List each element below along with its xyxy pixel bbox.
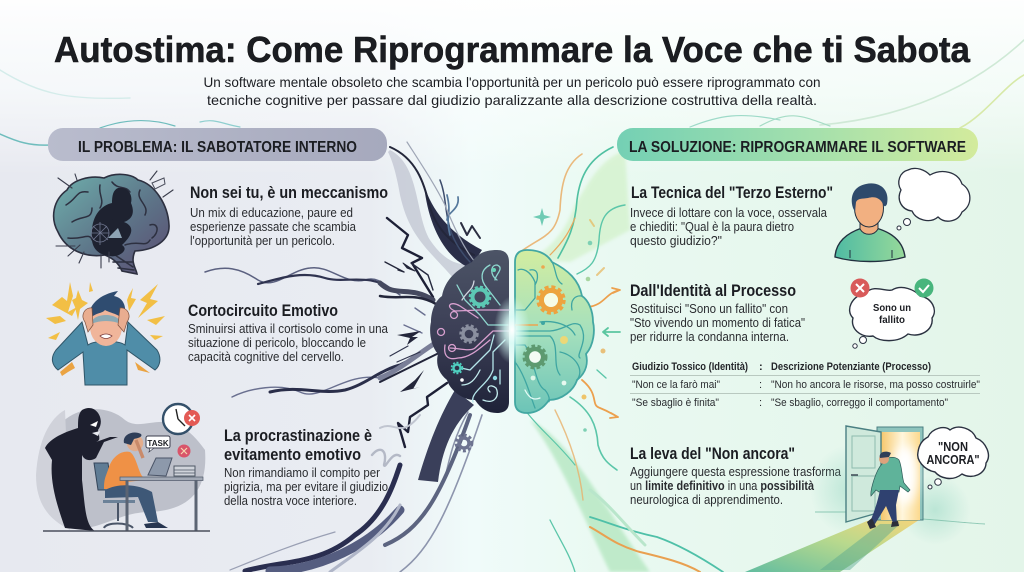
text block: Identita al Processo: Sostituisci "Sono un fallito" con <box>630 302 788 316</box>
panel: solution header: LA SOLUZIONE: RIPROGRAMMARE IL SOFTWARE <box>629 139 966 156</box>
icon: small gear below brain <box>456 435 472 451</box>
text block: Terzo Esterno: e chiediti: "Qual è la paura dietro <box>630 220 794 234</box>
text block: La procrastinazione <box>224 427 388 508</box>
text block: Non sei tu: Non sei tu, è un meccanismo <box>190 184 388 202</box>
flowing green and orange lines, right of brain <box>523 147 723 572</box>
icon: open door with walking man and NON ANCORA bubble: "NON <box>938 440 968 454</box>
text block: Non sei tu <box>190 184 388 248</box>
icon: brain with curled silhouette <box>54 171 173 274</box>
icon: open door with walking man and NON ANCORA bubble: ANCORA" <box>926 453 980 467</box>
text block: Identita al Processo: per ridurre la condanna interna. <box>630 330 789 344</box>
text block: Non sei tu: Un mix di educazione, paure ed <box>190 206 353 220</box>
icon: thought bubble Sono un fallito <box>850 278 934 348</box>
icon: thought bubble Sono un fallito: Sono un <box>873 302 911 314</box>
panel: problem header <box>48 128 387 161</box>
text block: Non ancora: Aggiungere questa espressione trasforma <box>630 465 841 479</box>
icon: person with thought cloud <box>835 168 970 262</box>
subtitle: tecniche cognitive per passare dal giudizio paralizzante alla descrizione costruttiva della realtà. <box>207 92 817 108</box>
text block: Cortocircuito Emotivo: capacità cognitive del cervello. <box>188 350 344 364</box>
text block: Cortocircuito Emotivo <box>188 302 388 364</box>
text block: Terzo Esterno: questo giudizio?" <box>630 234 722 248</box>
table: toxic judgement versus empowering description: : <box>759 361 763 373</box>
text block: Cortocircuito Emotivo: situazione di pericolo, bloccando le <box>188 336 366 350</box>
text block: Terzo Esterno: La Tecnica del "Terzo Esterno" <box>631 184 833 202</box>
table: toxic judgement versus empowering description: "Se sbaglio è finita" <box>632 397 719 409</box>
text block: Non ancora: un limite definitivo in una possibilità <box>630 479 814 493</box>
text block: Non ancora: La leva del "Non ancora" <box>630 445 795 463</box>
text block: La procrastinazione: evitamento emotivo <box>224 446 361 464</box>
table: toxic judgement versus empowering description: "Non ce la farò mai" <box>632 379 720 391</box>
icon: stressed man with lightning <box>46 282 165 385</box>
icon: shadow critic and man at desk <box>36 404 210 531</box>
text block: Terzo Esterno: Invece di lottare con la voce, osservala <box>630 206 827 220</box>
table: toxic judgement versus empowering description: Giudizio Tossico (Identità) <box>632 361 748 373</box>
icon: shadow critic and man at desk: TASK <box>147 439 169 448</box>
text block: La procrastinazione: pigrizia, ma per evitare il giudizio <box>224 480 388 494</box>
text block: Non ancora: neurologica di apprendimento. <box>630 493 783 507</box>
brain: left dark hemisphere <box>430 250 509 413</box>
table: toxic judgement versus empowering description: Descrizione Potenziante (Processo) <box>771 361 931 373</box>
text block: Cortocircuito Emotivo: Sminuirsi attiva il cortisolo come in una <box>188 322 388 336</box>
table: toxic judgement versus empowering description: "Se sbaglio, correggo il comportamento" <box>771 397 948 409</box>
subtitle: Un software mentale obsoleto che scambia l'opportunità per un pericolo può essere riprogrammato con <box>204 74 820 90</box>
text block: Identita al Processo: "Sto vivendo un momento di fatica" <box>630 316 805 330</box>
text block: Non ancora <box>630 445 841 507</box>
table: toxic judgement versus empowering description: "Non ho ancora le risorse, ma posso costruirle" <box>771 379 980 391</box>
panel: problem header: IL PROBLEMA: IL SABOTATORE INTERNO <box>78 139 357 156</box>
text block: Identita al Processo: Dall'Identità al Processo <box>630 282 796 300</box>
title: Autostima: Come Riprogrammare la Voce che ti Sabota <box>54 29 971 70</box>
panel: solution header <box>617 128 978 161</box>
text block: Non sei tu: esperienze passate che scambia <box>190 220 356 234</box>
text block: La procrastinazione: La procrastinazione è <box>224 427 372 445</box>
text block: La procrastinazione: della nostra voce interiore. <box>224 494 357 508</box>
dark tangled strands, left of brain <box>205 142 482 572</box>
text block: Terzo Esterno <box>630 184 833 248</box>
brain centre glow <box>494 296 530 364</box>
text block: Identita al Processo <box>630 282 805 344</box>
table: toxic judgement versus empowering description: : <box>759 379 762 391</box>
text block: La procrastinazione: Non rimandiamo il compito per <box>224 466 380 480</box>
text block: Non sei tu: l'opportunità per un pericolo. <box>190 234 335 248</box>
brain: right green hemisphere <box>515 250 594 413</box>
text block: Cortocircuito Emotivo: Cortocircuito Emotivo <box>188 302 338 320</box>
subtitle <box>204 74 820 108</box>
icon: thought bubble Sono un fallito: fallito <box>879 314 905 326</box>
icon: open door with walking man and NON ANCORA bubble <box>745 426 988 572</box>
table: toxic judgement versus empowering description <box>630 361 980 409</box>
table: toxic judgement versus empowering description: : <box>759 397 762 409</box>
